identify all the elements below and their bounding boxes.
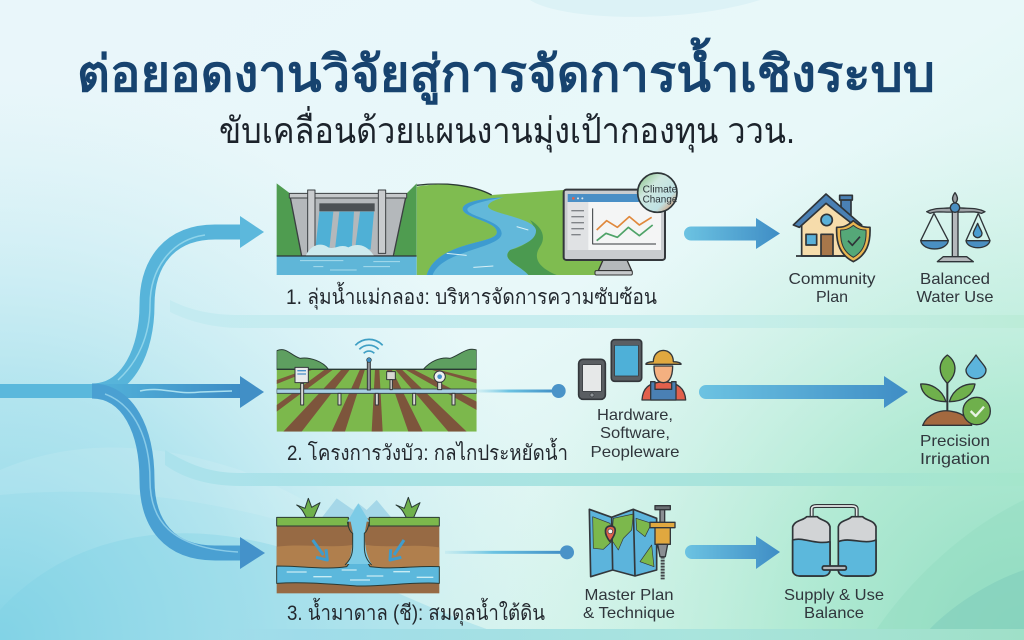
label: master plan and technique: & Technique: [583, 605, 675, 622]
row 1: Mae Klong illustrations: [277, 173, 677, 275]
icon: balance scale with water drop: [921, 193, 990, 262]
arrow: project 3 to outcome: [685, 536, 780, 569]
heading: project 1: 1. ลุ่มน้ำแม่กลอง: บริหารจัดการความซับซ้อน: [286, 282, 657, 310]
arrow: branch to project 2: [100, 376, 264, 408]
label: hardware software peopleware: Peopleware: [590, 444, 680, 461]
icon: wifi signal: [355, 339, 383, 353]
label: community plan: Community: [788, 271, 876, 288]
arrow: branch to project 3: [92, 391, 265, 569]
label: hardware software peopleware: Hardware,: [597, 407, 673, 424]
title: ต่อยอดงานวิจัยสู่การจัดการน้ำเชิงระบบ: [77, 37, 935, 105]
label: balanced water use: [916, 271, 994, 306]
label: precision irrigation: [920, 433, 990, 468]
connector line with dot: [445, 545, 574, 559]
icon: mobile devices: [579, 340, 642, 399]
label: hardware software peopleware: Software,: [600, 425, 670, 442]
label: supply and use balance: Supply & Use: [784, 587, 884, 604]
row 2: Wang Bua smart irrigation: [277, 339, 686, 432]
illustration: dam: [277, 183, 417, 275]
arrow: main stream: [0, 384, 110, 398]
illustration: meandering river: [417, 184, 603, 275]
arrow: project 1 to outcomes: [684, 218, 780, 249]
subtitle: ขับเคลื่อนด้วยแผนงานมุ่งเป้ากองทุน ววน.: [219, 106, 795, 153]
horizontal water bands: [165, 300, 1024, 640]
label: master plan and technique: [583, 587, 675, 622]
arrow: branch to project 1: [92, 216, 264, 391]
heading: project 3: 3. น้ำมาดาล (ชี): สมดุลน้ำใต้ดิน: [287, 598, 545, 626]
heading: project 2: 2. โครงการวังบัว: กลไกประหยัดน้ำ: [287, 438, 568, 465]
illustration: groundwater cross-section: [277, 497, 439, 593]
illustration: irrigated field: [277, 349, 477, 432]
icon: farmer: [642, 350, 686, 400]
label: precision irrigation: Precision: [920, 433, 990, 450]
icon: seedling with water drop and check: [921, 355, 990, 425]
badge: climate change: Change: [643, 195, 677, 206]
row 3: Nam Badan groundwater: [277, 497, 675, 593]
label: community plan: [788, 271, 876, 306]
badge: climate change: [638, 173, 677, 212]
label: balanced water use: Water Use: [916, 289, 994, 306]
label: community plan: Plan: [816, 289, 848, 306]
label: hardware software peopleware: [590, 407, 680, 461]
icon: twin water tanks: [793, 506, 876, 576]
label: master plan and technique: Master Plan: [584, 587, 674, 604]
label: supply and use balance: Balance: [804, 605, 864, 622]
icon: map with pin: [589, 509, 657, 577]
badge: climate change: Climate: [643, 184, 677, 195]
icon: community house with shield: [793, 194, 870, 262]
label: balanced water use: Balanced: [920, 271, 990, 288]
icon: drilling rig: [650, 506, 675, 579]
branching river arrows: [0, 216, 265, 569]
arrow: project 2 to outcome: [699, 376, 908, 408]
label: supply and use balance: [784, 587, 884, 622]
illustration: dashboard monitor: [564, 190, 665, 275]
label: precision irrigation: Irrigation: [920, 451, 990, 468]
connector line with dot: [477, 384, 566, 398]
